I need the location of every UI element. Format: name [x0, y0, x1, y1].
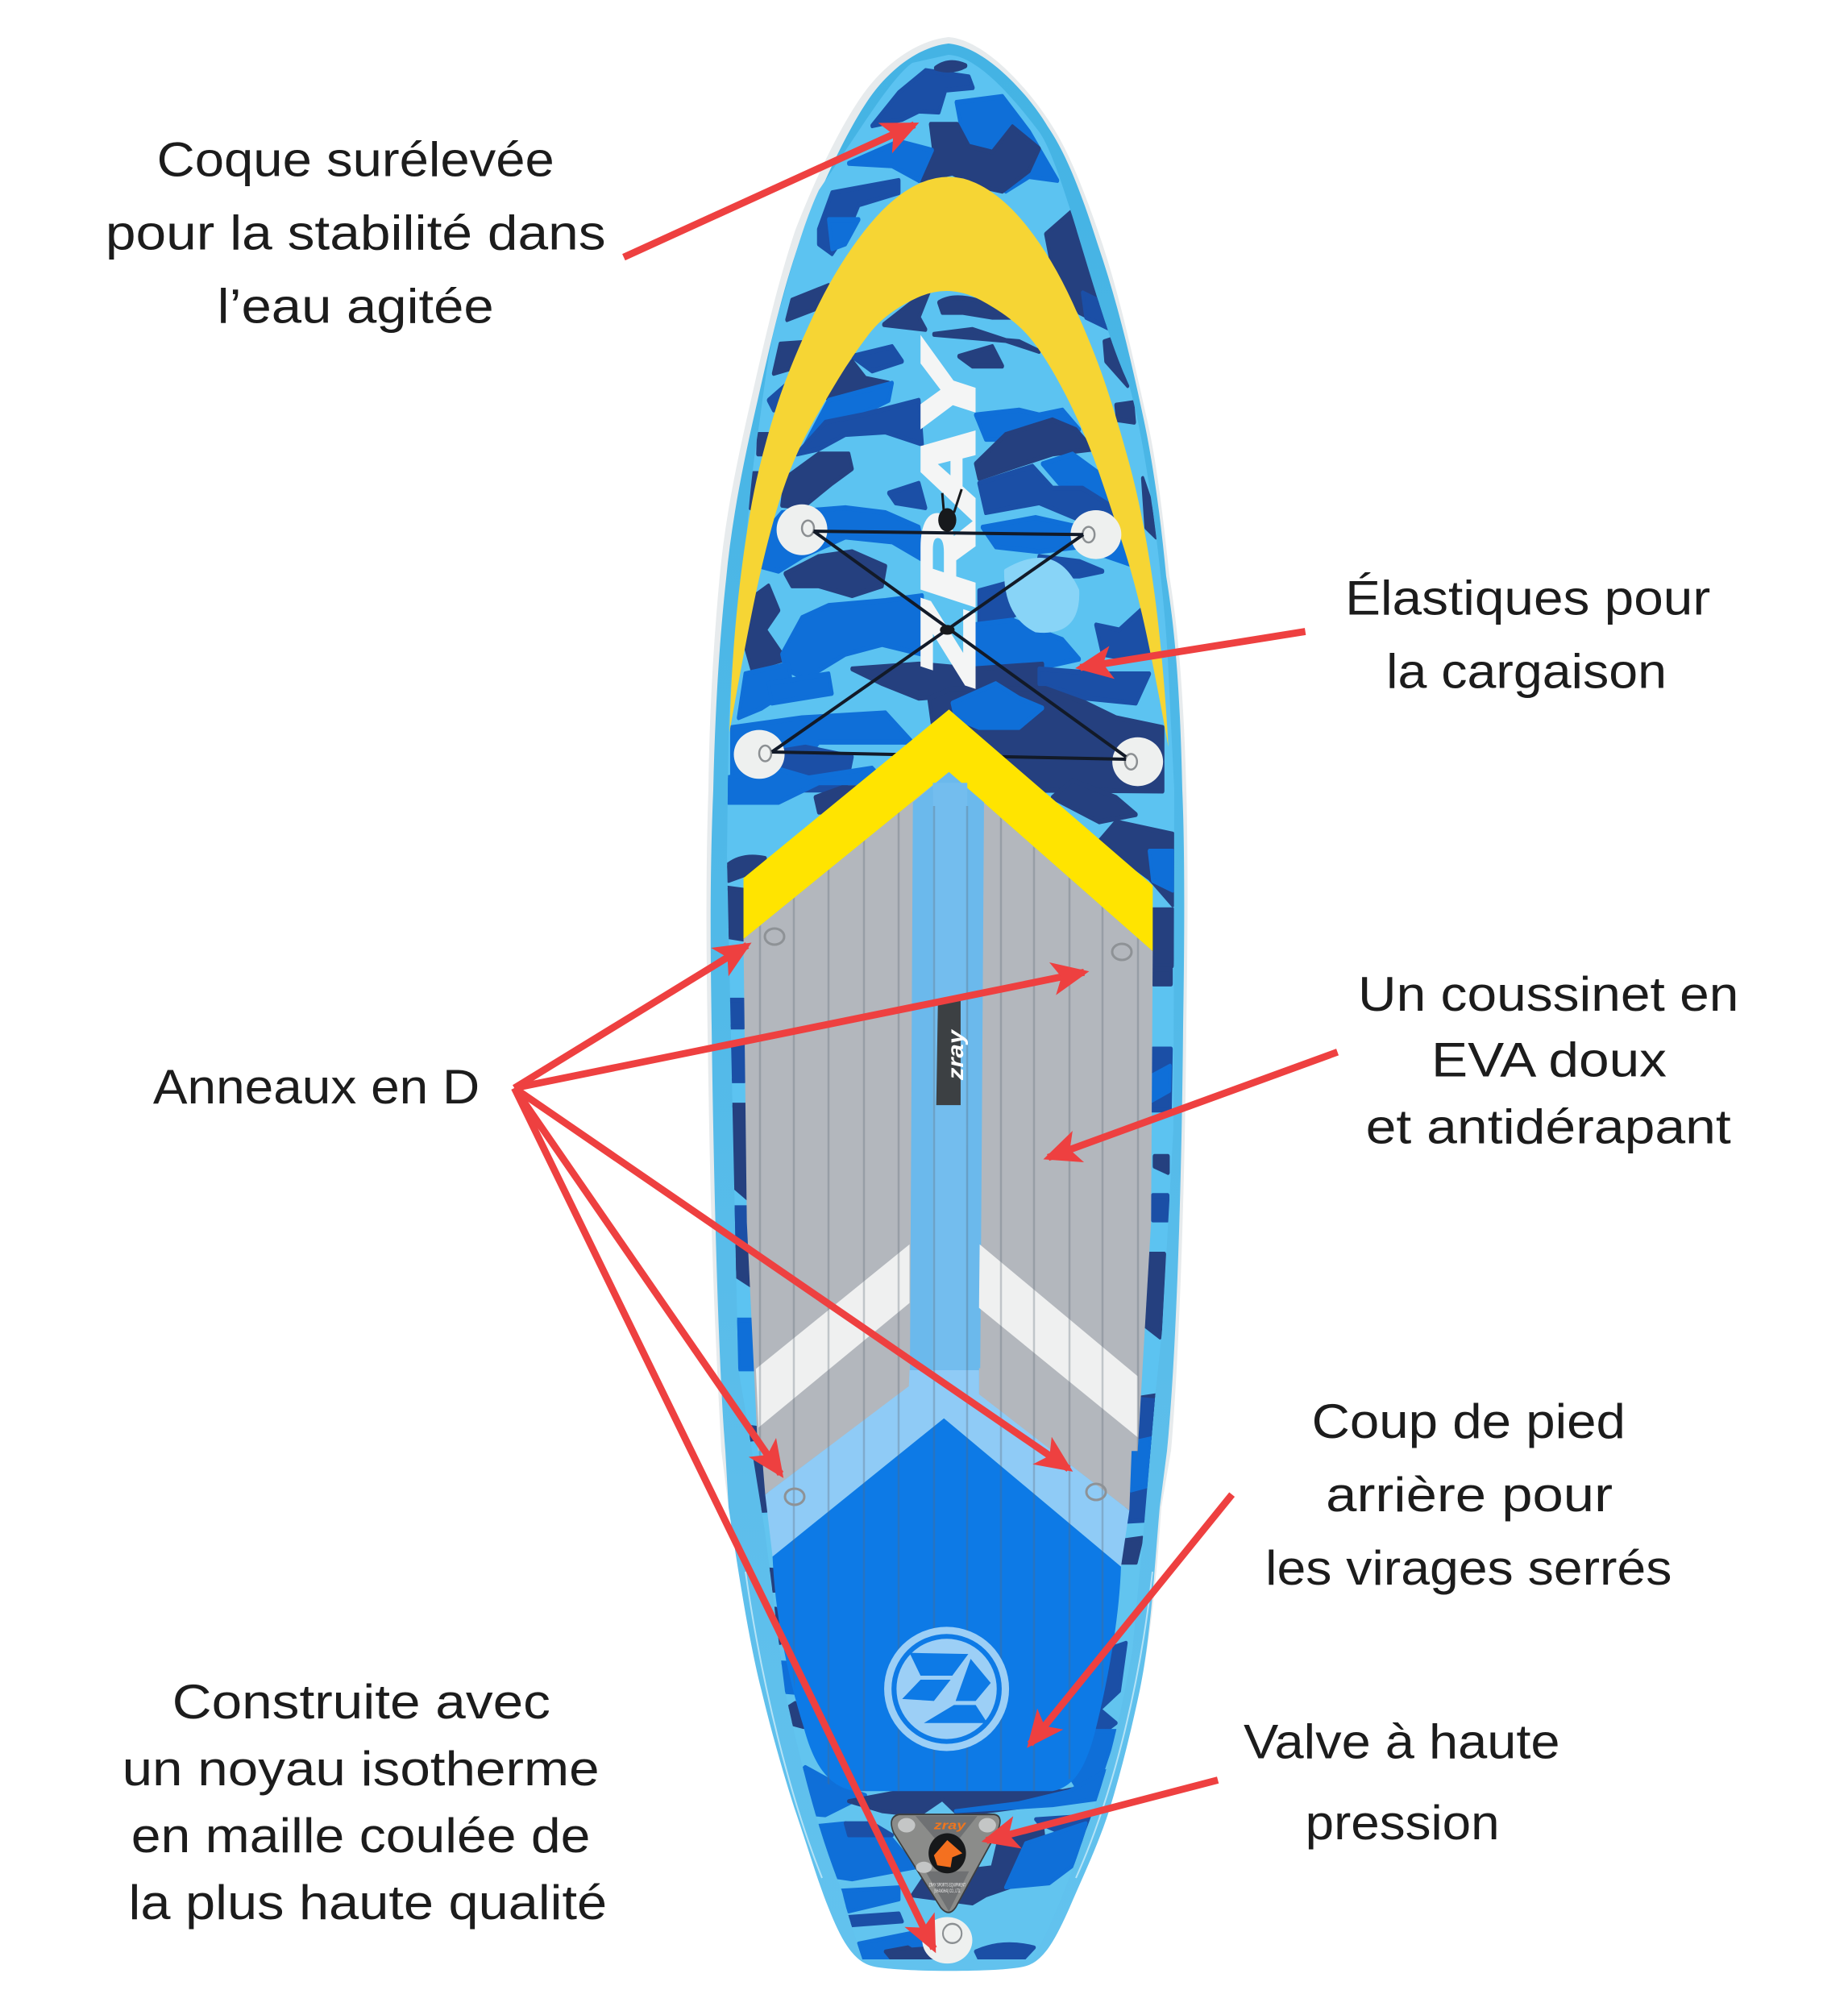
paddle board: [707, 37, 1193, 1975]
blue tail pad: [773, 1419, 1121, 1791]
label: kick tail: Coup de pied: [1312, 1394, 1626, 1448]
annotations: [106, 125, 1738, 1948]
valve plate: zray: [932, 1818, 967, 1832]
arrow: EVA pad: [1048, 1052, 1338, 1157]
arrow: hull: [624, 125, 915, 257]
label: valve: pression: [1306, 1795, 1500, 1850]
valve plate: (SHANGHAI) CO., LTD.: [934, 1889, 961, 1894]
traction pad: [744, 709, 1152, 1805]
centre stripe: [910, 772, 984, 1451]
label: construction: la plus haute qualité: [129, 1875, 607, 1930]
label: kick tail: les virages serrés: [1265, 1540, 1672, 1595]
valve plate: ZRAY SPORTS EQUIPMENT: [929, 1883, 966, 1888]
cargo D-ring pads and bungee: [734, 489, 1163, 786]
camo tail: [745, 1398, 1154, 1967]
label: construction: Construite avec: [172, 1674, 550, 1729]
camo nose and centre: [732, 63, 1163, 791]
inner camo: [884, 288, 931, 330]
camouflage pattern: [709, 40, 1193, 1975]
label: EVA pad: et antidérapant: [1366, 1099, 1731, 1154]
label: kick tail: arrière pour: [1326, 1467, 1613, 1522]
label: hull: pour la stabilité dans: [106, 206, 606, 260]
label: hull: Coque surélevée: [157, 132, 554, 187]
pad grooves: [760, 806, 1138, 1805]
label: construction: un noyau isotherme: [123, 1741, 600, 1796]
label: D-rings: Anneaux en D: [153, 1059, 480, 1114]
traction pad: zray: [943, 1028, 968, 1081]
label: EVA pad: EVA doux: [1431, 1032, 1667, 1087]
arrow: bungee: [1080, 631, 1306, 667]
board white rim: [707, 37, 1188, 1971]
label: bungee: la cargaison: [1386, 644, 1667, 699]
tail D-ring: [922, 1917, 972, 1963]
lower light chevron: [759, 1369, 1132, 1567]
label: EVA pad: Un coussinet en: [1358, 966, 1738, 1021]
valve plate: [891, 1814, 1000, 1913]
yellow nose arc: [729, 177, 1169, 747]
white chevrons: [756, 1244, 1138, 1437]
arrow: valve: [986, 1780, 1218, 1840]
arrow: kick tail: [1030, 1494, 1232, 1744]
grey pad: [744, 772, 1152, 1451]
label: valve: Valve à haute: [1244, 1714, 1560, 1768]
arrows: D-rings: [514, 945, 1084, 1948]
pad D-rings: [765, 929, 1132, 1505]
logo on nose: ZRAY: [907, 341, 990, 686]
carry handle: [936, 1000, 961, 1105]
label: hull: l’eau agitée: [218, 279, 494, 334]
yellow chevron: [744, 709, 1152, 951]
tail side highlight: [745, 1572, 1152, 1878]
board blue band: [711, 44, 1184, 1971]
Z logo on tail pad: [884, 1627, 1009, 1751]
label: construction: en maille coulée de: [131, 1808, 590, 1863]
camo deck sides: [725, 768, 1173, 1451]
label: bungee: Élastiques pour: [1345, 571, 1710, 625]
